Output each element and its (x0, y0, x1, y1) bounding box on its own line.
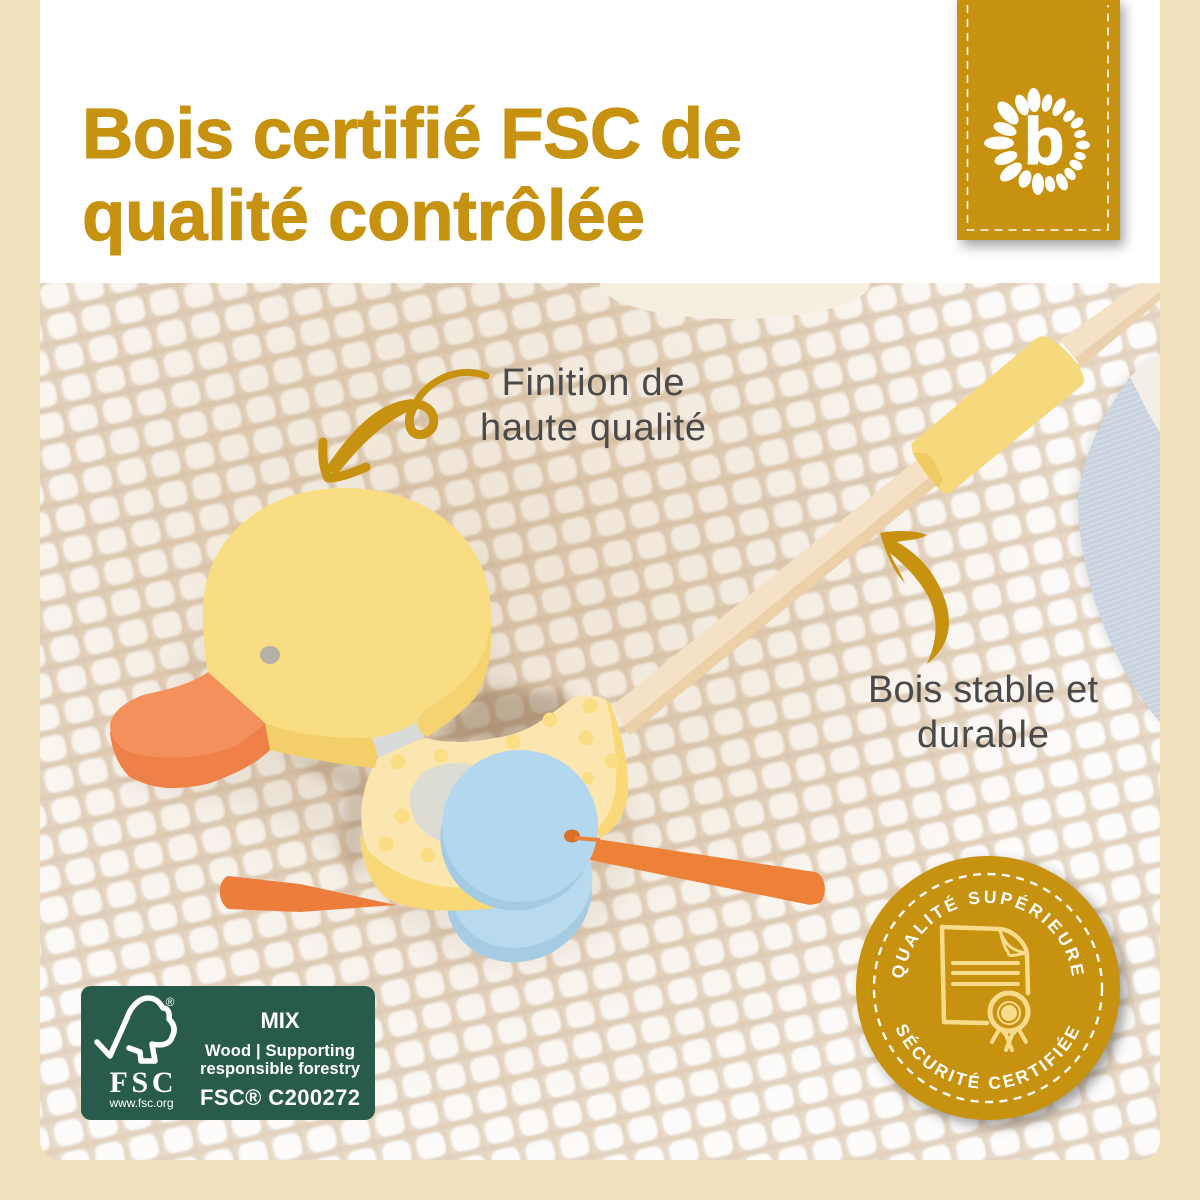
toy stick (612, 283, 1165, 735)
FSC label: www.fsc.org (108, 1096, 174, 1110)
icon: certificate (942, 927, 1028, 1050)
head right rim (417, 620, 491, 737)
head lower side (262, 722, 377, 768)
FSC label: FSC (110, 1066, 174, 1099)
arrow: to wooden stick (880, 531, 949, 664)
top arc text: QUALITÉ SUPÉRIEURE (892, 890, 1084, 978)
photo panel: woven rug with duck toy (30, 247, 1170, 1170)
quality seal badge (854, 854, 1134, 1134)
callout: finish quality: Finition de (502, 362, 684, 404)
title: qualité contrôlée (82, 177, 645, 256)
icon: FSC check tree (97, 998, 174, 1061)
callout: stable wood (868, 669, 1098, 756)
callout: stable wood: durable (917, 714, 1049, 756)
orange right foot (590, 838, 825, 905)
header panel (40, 0, 1160, 284)
yellow handle grip (912, 336, 1084, 494)
cream cushion (600, 283, 870, 319)
arrow: to head finish (323, 372, 486, 478)
FSC label: responsible forestry (200, 1060, 361, 1078)
duck head (203, 488, 491, 768)
blue upper wheel (440, 750, 600, 910)
blue lower wheel (447, 860, 592, 962)
grey knitted cushion (1076, 356, 1165, 725)
FSC label: MIX (260, 1008, 300, 1033)
brand ribbon tag (957, 0, 1124, 246)
callout: stable wood: Bois stable et (868, 669, 1098, 711)
wing grey patch (410, 763, 472, 841)
duck body (360, 695, 628, 911)
FSC label: ® (166, 995, 175, 1009)
rug texture (30, 270, 1170, 1170)
callout: finish quality: haute qualité (480, 407, 706, 449)
icon: brand sunflower logo: b (1024, 104, 1064, 178)
duck neck (371, 722, 425, 758)
title (82, 95, 742, 256)
callout: finish quality (480, 362, 706, 449)
FSC label: Wood | Supporting (205, 1042, 355, 1060)
orange left foot (220, 876, 396, 912)
FSC label: FSC® C200272 (200, 1085, 360, 1110)
polka dots (378, 698, 620, 862)
icon: brand sunflower logo (984, 88, 1090, 195)
title: Bois certifié FSC de (82, 95, 742, 174)
duck beak (110, 672, 270, 788)
duck shadow (135, 636, 635, 962)
FSC label (81, 986, 375, 1120)
bottom arc text: SÉCURITÉ CERTIFIÉE (896, 1024, 1080, 1089)
icon: duck eye (260, 646, 280, 664)
